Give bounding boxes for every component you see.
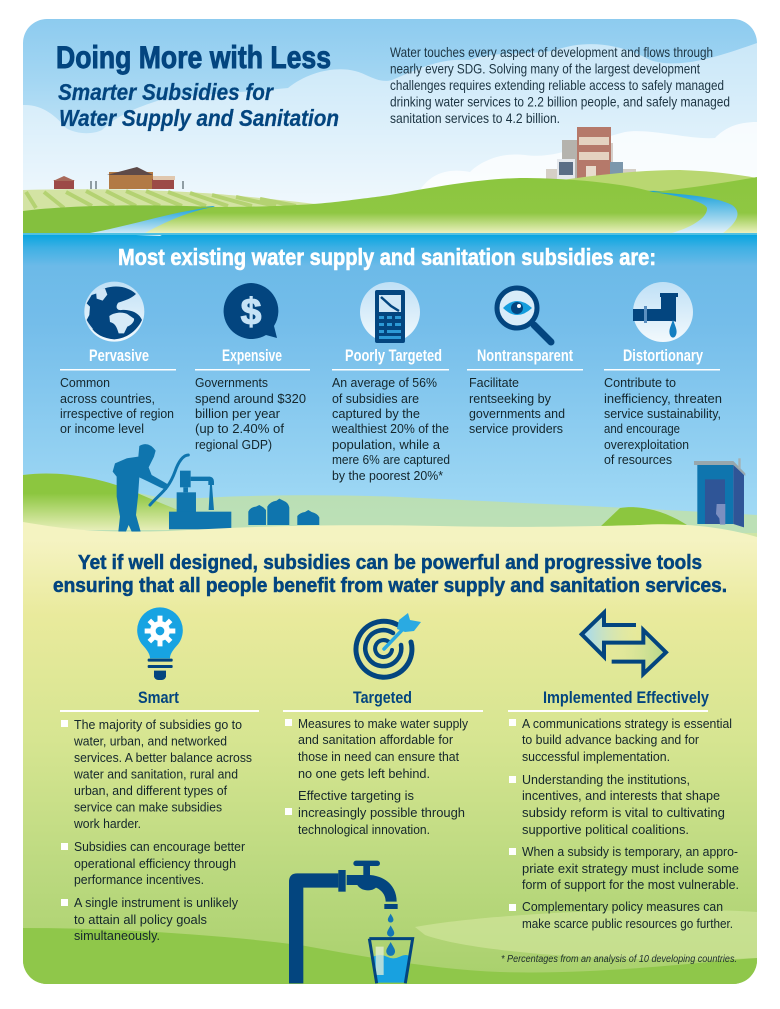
illustration: city buildings <box>546 127 636 181</box>
subtitle: Water Supply and Sanitation <box>59 105 339 131</box>
panel: subsidies band background <box>23 233 757 533</box>
column heading: Implemented Effectively: Implemented Effectively <box>543 688 709 707</box>
title: Doing More with Less <box>56 39 331 75</box>
illustration: upper clouds <box>23 43 757 204</box>
text: distortionary: of resources <box>604 453 672 467</box>
list: implemented effectively <box>509 717 739 931</box>
list: targeted: and sanitation affordable for <box>298 733 454 747</box>
list: targeted <box>285 717 469 837</box>
list: smart: A single instrument is unlikely <box>74 896 239 910</box>
text: distortionary: overexploitation <box>604 438 689 452</box>
heading: well designed subsidies: Yet if well designed, subsidies can be powerful and progressive tools <box>78 551 702 574</box>
illustration: water tanks <box>248 499 319 525</box>
text: poorly targeted: population, while a <box>332 438 441 452</box>
list: implemented effectively: When a subsidy is temporary, an appro- <box>522 845 738 859</box>
icon: exchange arrows <box>582 613 666 674</box>
text: expensive: (up to 2.40% of <box>195 422 284 436</box>
list: smart: water, urban, and networked <box>73 734 227 748</box>
list: targeted: no one gets left behind. <box>298 767 430 781</box>
icon: dollar speech bubble <box>224 283 278 339</box>
list: targeted: those in need can ensure that <box>298 750 459 764</box>
column heading: Pervasive: Pervasive <box>89 346 149 365</box>
text: expensive: Governments <box>195 376 268 390</box>
column heading: Targeted: Targeted <box>353 688 412 707</box>
list: implemented effectively: supportive political coalitions. <box>522 823 689 837</box>
text: pervasive: or income level <box>60 422 144 436</box>
list: smart: Subsidies can encourage better <box>74 840 246 854</box>
text: expensive <box>195 376 306 452</box>
column heading: Smart: Smart <box>138 688 179 707</box>
text: pervasive: Common <box>60 376 110 390</box>
column heading: Poorly Targeted: Poorly Targeted <box>345 346 442 365</box>
list: implemented effectively: subsidy reform is vital to cultivating <box>522 806 725 820</box>
list: implemented effectively: incentives, and interests that shape <box>522 789 720 803</box>
illustration: pale hill highlight <box>415 910 757 960</box>
list: targeted: Measures to make water supply <box>298 717 469 731</box>
column heading: Distortionary <box>604 346 720 370</box>
icon: faucet filling glass <box>289 861 413 983</box>
text: pervasive: across countries, <box>60 392 155 406</box>
intro text: Water touches every aspect of development and flows through <box>390 44 713 60</box>
list: smart: service can make subsidies <box>74 800 222 814</box>
illustration: foreground green hill <box>145 178 707 233</box>
text: expensive: spend around $320 <box>195 392 306 406</box>
column heading: Pervasive <box>60 346 176 370</box>
list: smart: work harder. <box>73 817 141 831</box>
list: smart: water and sanitation, rural and <box>73 768 238 782</box>
band top edge <box>23 233 757 235</box>
text: poorly targeted: by the poorest 20%* <box>332 469 443 483</box>
list: implemented effectively: A communications strategy is essential <box>522 717 732 731</box>
text: expensive: regional GDP) <box>195 438 272 452</box>
column heading: Expensive <box>195 346 310 370</box>
illustration: striped farm field <box>23 189 315 211</box>
text: nontransparent: rentseeking by <box>469 392 552 406</box>
footnote: * Percentages from an analysis of 10 developing countries. <box>501 954 737 965</box>
list: implemented effectively: make scarce public resources go further. <box>522 917 733 931</box>
icon: light bulb with gear <box>137 607 183 680</box>
list: implemented effectively: priate exit strategy must include some <box>522 862 739 876</box>
text: distortionary: Contribute to <box>604 376 676 390</box>
column heading: Nontransparent: Nontransparent <box>477 346 573 365</box>
icon: globe <box>84 282 144 342</box>
intro text: sanitation services to 4.2 billion. <box>390 110 560 126</box>
text: distortionary <box>604 376 722 467</box>
text: nontransparent: governments and <box>469 407 565 421</box>
illustration: river <box>85 191 738 236</box>
text: poorly targeted: wealthiest 20% of the <box>331 422 449 436</box>
text: poorly targeted: mere 6% are captured <box>332 453 450 467</box>
text: nontransparent: service providers <box>469 422 563 436</box>
icon: calculator <box>360 282 420 343</box>
text: nontransparent <box>469 376 565 436</box>
illustration: green hills behind pump <box>23 473 757 540</box>
column heading: Distortionary: Distortionary <box>623 346 703 365</box>
list: smart: services. A better balance across <box>74 751 252 765</box>
text: nontransparent: Facilitate <box>469 376 519 390</box>
intro text <box>390 44 730 126</box>
list: smart: urban, and different types of <box>74 784 227 798</box>
illustration: sky <box>23 19 757 204</box>
illustration: person at water pump <box>113 444 231 532</box>
panel: lower green section background <box>23 500 757 984</box>
icon: target with arrow <box>356 613 421 677</box>
illustration: right green bank <box>653 177 757 233</box>
list: implemented effectively: to build advance backing and for <box>522 733 700 747</box>
illustration: bottom green hill <box>23 928 757 984</box>
list: smart: performance incentives. <box>74 873 204 887</box>
list: targeted: Effective targeting is <box>298 789 414 803</box>
illustration: latrine <box>694 458 745 527</box>
subtitle: Smarter Subsidies for <box>58 79 274 105</box>
intro text: challenges requires extending reliable access to safely managed <box>390 77 724 93</box>
heading: well designed subsidies <box>53 551 727 597</box>
column heading: Nontransparent <box>467 346 583 370</box>
text: poorly targeted <box>331 376 450 483</box>
illustration: cream ground overlap <box>23 522 757 540</box>
illustration: farm houses <box>53 167 184 189</box>
list: implemented effectively: form of support for the most vulnerable. <box>522 878 739 892</box>
text: distortionary: and encourage <box>604 422 680 436</box>
intro text: nearly every SDG. Solving many of the largest development <box>390 60 700 76</box>
list: smart: to attain all policy goals <box>74 913 207 927</box>
list: implemented effectively: Understanding the institutions, <box>522 773 690 787</box>
list: smart: operational efficiency through <box>74 857 236 871</box>
text: poorly targeted: An average of 56% <box>332 376 437 390</box>
list: smart: The majority of subsidies go to <box>74 718 242 732</box>
text: expensive: billion per year <box>195 407 281 421</box>
subtitle <box>58 79 339 131</box>
heading: most existing subsidies: Most existing water supply and sanitation subsidies are: <box>118 244 656 270</box>
icon: leaking pipe <box>633 282 693 342</box>
text: pervasive: irrespective of region <box>60 407 174 421</box>
list: smart: simultaneously. <box>74 929 160 943</box>
text: distortionary: service sustainability, <box>604 407 721 421</box>
illustration: left green hill <box>23 205 213 233</box>
heading: well designed subsidies: ensuring that all people benefit from water supply and sanitation services. <box>53 574 727 597</box>
column heading: Expensive: Expensive <box>222 346 282 365</box>
intro text: drinking water services to 2.2 billion people, and safely managed <box>390 94 730 110</box>
illustration: lower clouds <box>420 122 757 190</box>
text: pervasive <box>60 376 174 436</box>
text: poorly targeted: of subsidies are <box>332 392 419 406</box>
icon: dollar speech bubble: $ <box>241 291 262 332</box>
column heading: Poorly Targeted <box>332 346 449 370</box>
list: targeted: technological innovation. <box>298 823 430 837</box>
text: poorly targeted: captured by the <box>332 407 420 421</box>
illustration: back hill right <box>566 170 754 191</box>
list: implemented effectively: Complementary policy measures can <box>522 900 723 914</box>
list: targeted: increasingly possible through <box>298 806 465 820</box>
list: smart <box>61 718 252 943</box>
list: implemented effectively: successful implementation. <box>522 750 670 764</box>
text: distortionary: inefficiency, threaten <box>604 392 722 406</box>
icon: magnifying glass with eye <box>497 288 551 342</box>
illustration: lower ground <box>23 540 757 984</box>
